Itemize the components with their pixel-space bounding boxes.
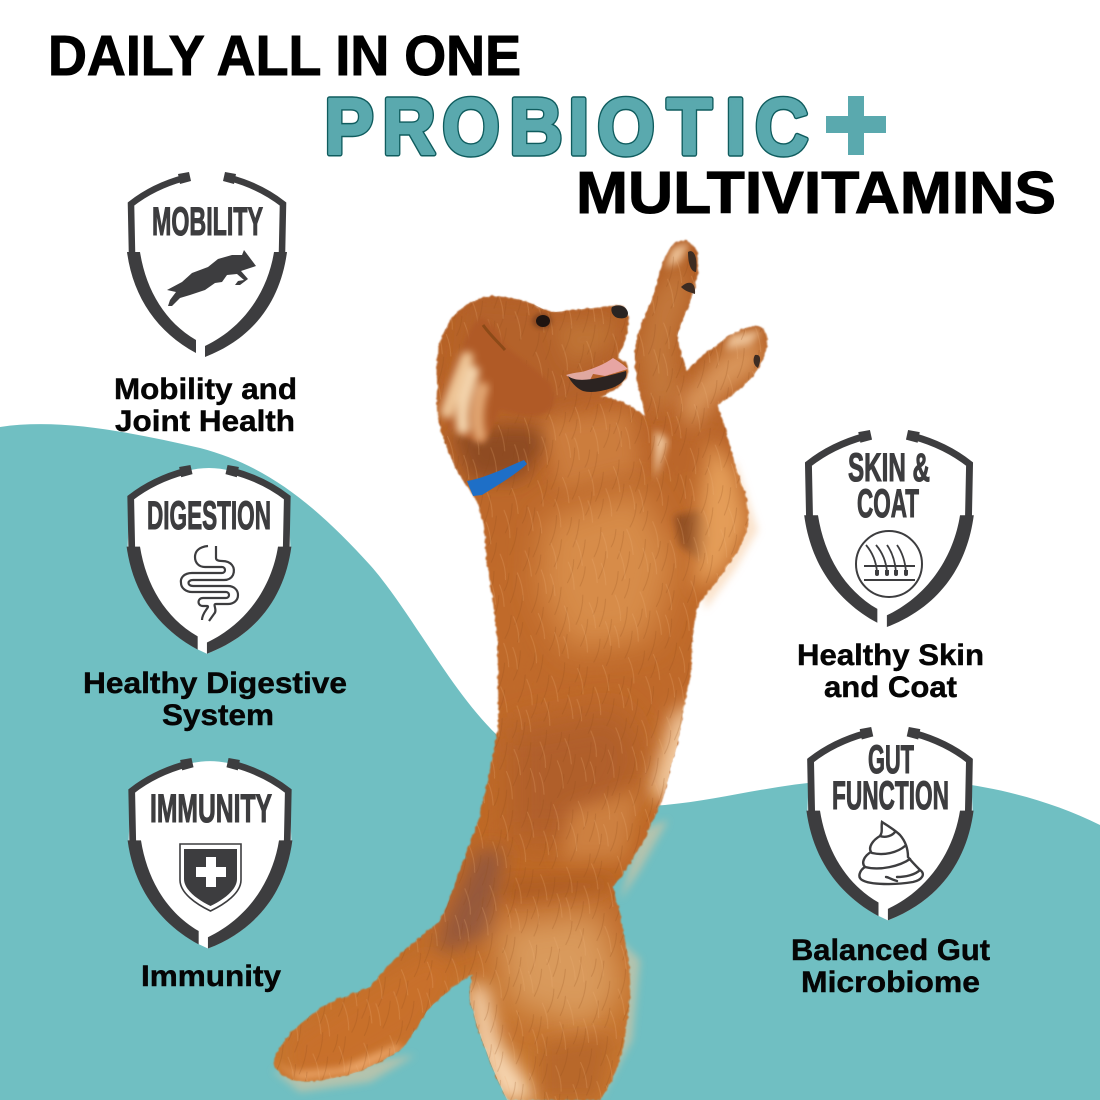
- lower belly glow: [560, 790, 640, 860]
- label: healthy skin and coat: Healthy Skin: [797, 639, 984, 672]
- label: balanced gut microbiome: Microbiome: [801, 966, 980, 999]
- badge heading: SKIN &: [848, 446, 930, 490]
- badge: immunity: [128, 758, 292, 949]
- lower thigh: [540, 1035, 612, 1100]
- title: multivitamins: MULTIVITAMINS: [576, 160, 1056, 226]
- icon: cross shield: [180, 844, 241, 911]
- label: mobility and joint health: [114, 373, 297, 438]
- neck shadow: [450, 425, 560, 480]
- cream sliver under arm: [655, 430, 668, 480]
- badge heading: IMMUNITY: [150, 787, 272, 831]
- title: probiotic plus: PROBIOTIC: [324, 82, 808, 172]
- label: healthy digestive system: [83, 667, 347, 732]
- ear cream fur: [447, 358, 483, 436]
- dog silhouette: [273, 240, 768, 1100]
- label: immunity: Immunity: [141, 960, 281, 993]
- head tone: [460, 300, 620, 420]
- tail tone: [290, 955, 455, 1078]
- dog shading and fur: [260, 230, 780, 1100]
- dog fur halo: [272, 460, 758, 1100]
- second leg light: [680, 335, 762, 430]
- hip light: [495, 910, 625, 1030]
- badge heading: GUT: [868, 738, 914, 782]
- paw light: [665, 242, 762, 350]
- background: teal wave: [0, 424, 1100, 1100]
- badge: skin and coat: [804, 430, 974, 627]
- label: balanced gut microbiome: [791, 934, 990, 999]
- nose: [611, 305, 628, 318]
- collar: [467, 460, 527, 496]
- badge heading second line: FUNCTION: [832, 774, 949, 818]
- badge heading: MOBILITY: [152, 200, 263, 244]
- leg cream: [468, 985, 540, 1100]
- badge heading second line: COAT: [857, 482, 919, 526]
- badge heading: DIGESTION: [147, 494, 271, 538]
- badge: mobility: [127, 172, 287, 357]
- fur strokes dark: [260, 230, 780, 1100]
- fluffy right side: [695, 440, 748, 590]
- belly dark: [510, 710, 645, 840]
- ear dark fold: [483, 325, 505, 350]
- tail light edge: [272, 1045, 405, 1080]
- badge: gut function: [806, 727, 974, 920]
- label: mobility and joint health: Joint Health: [115, 405, 295, 438]
- dark inner shoulder: [672, 508, 706, 560]
- label: healthy skin and coat: [797, 639, 984, 704]
- icon: leaping dog: [167, 250, 256, 306]
- tail base dark: [435, 850, 505, 955]
- right belly highlight: [650, 700, 695, 805]
- badge: digestion: [127, 465, 291, 654]
- icon: stool swirl: [859, 822, 923, 884]
- title: probiotic plus: PROBIOTIC: [324, 82, 808, 172]
- label: healthy skin and coat: and Coat: [824, 671, 957, 704]
- paw pads: [681, 251, 760, 368]
- label: balanced gut microbiome: Balanced Gut: [791, 934, 990, 967]
- label: healthy digestive system: System: [162, 699, 274, 732]
- ear: [440, 317, 554, 443]
- waist dark band: [509, 879, 618, 900]
- muzzle highlight: [555, 318, 612, 365]
- icon: intestines: [181, 546, 238, 621]
- chest warm: [540, 490, 675, 650]
- mouth: [566, 358, 628, 392]
- upper chest streak: [540, 410, 640, 490]
- eye: [532, 313, 552, 329]
- raised leg tone: [640, 260, 690, 410]
- title: daily all in one: DAILY ALL IN ONE: [48, 24, 521, 88]
- fur strokes light: [288, 263, 768, 1100]
- photo: golden retriever standing: [260, 230, 780, 1100]
- label: healthy digestive system: Healthy Digestive: [83, 667, 347, 700]
- icon: hair follicles: [856, 531, 922, 597]
- label: mobility and joint health: Mobility and: [114, 373, 297, 406]
